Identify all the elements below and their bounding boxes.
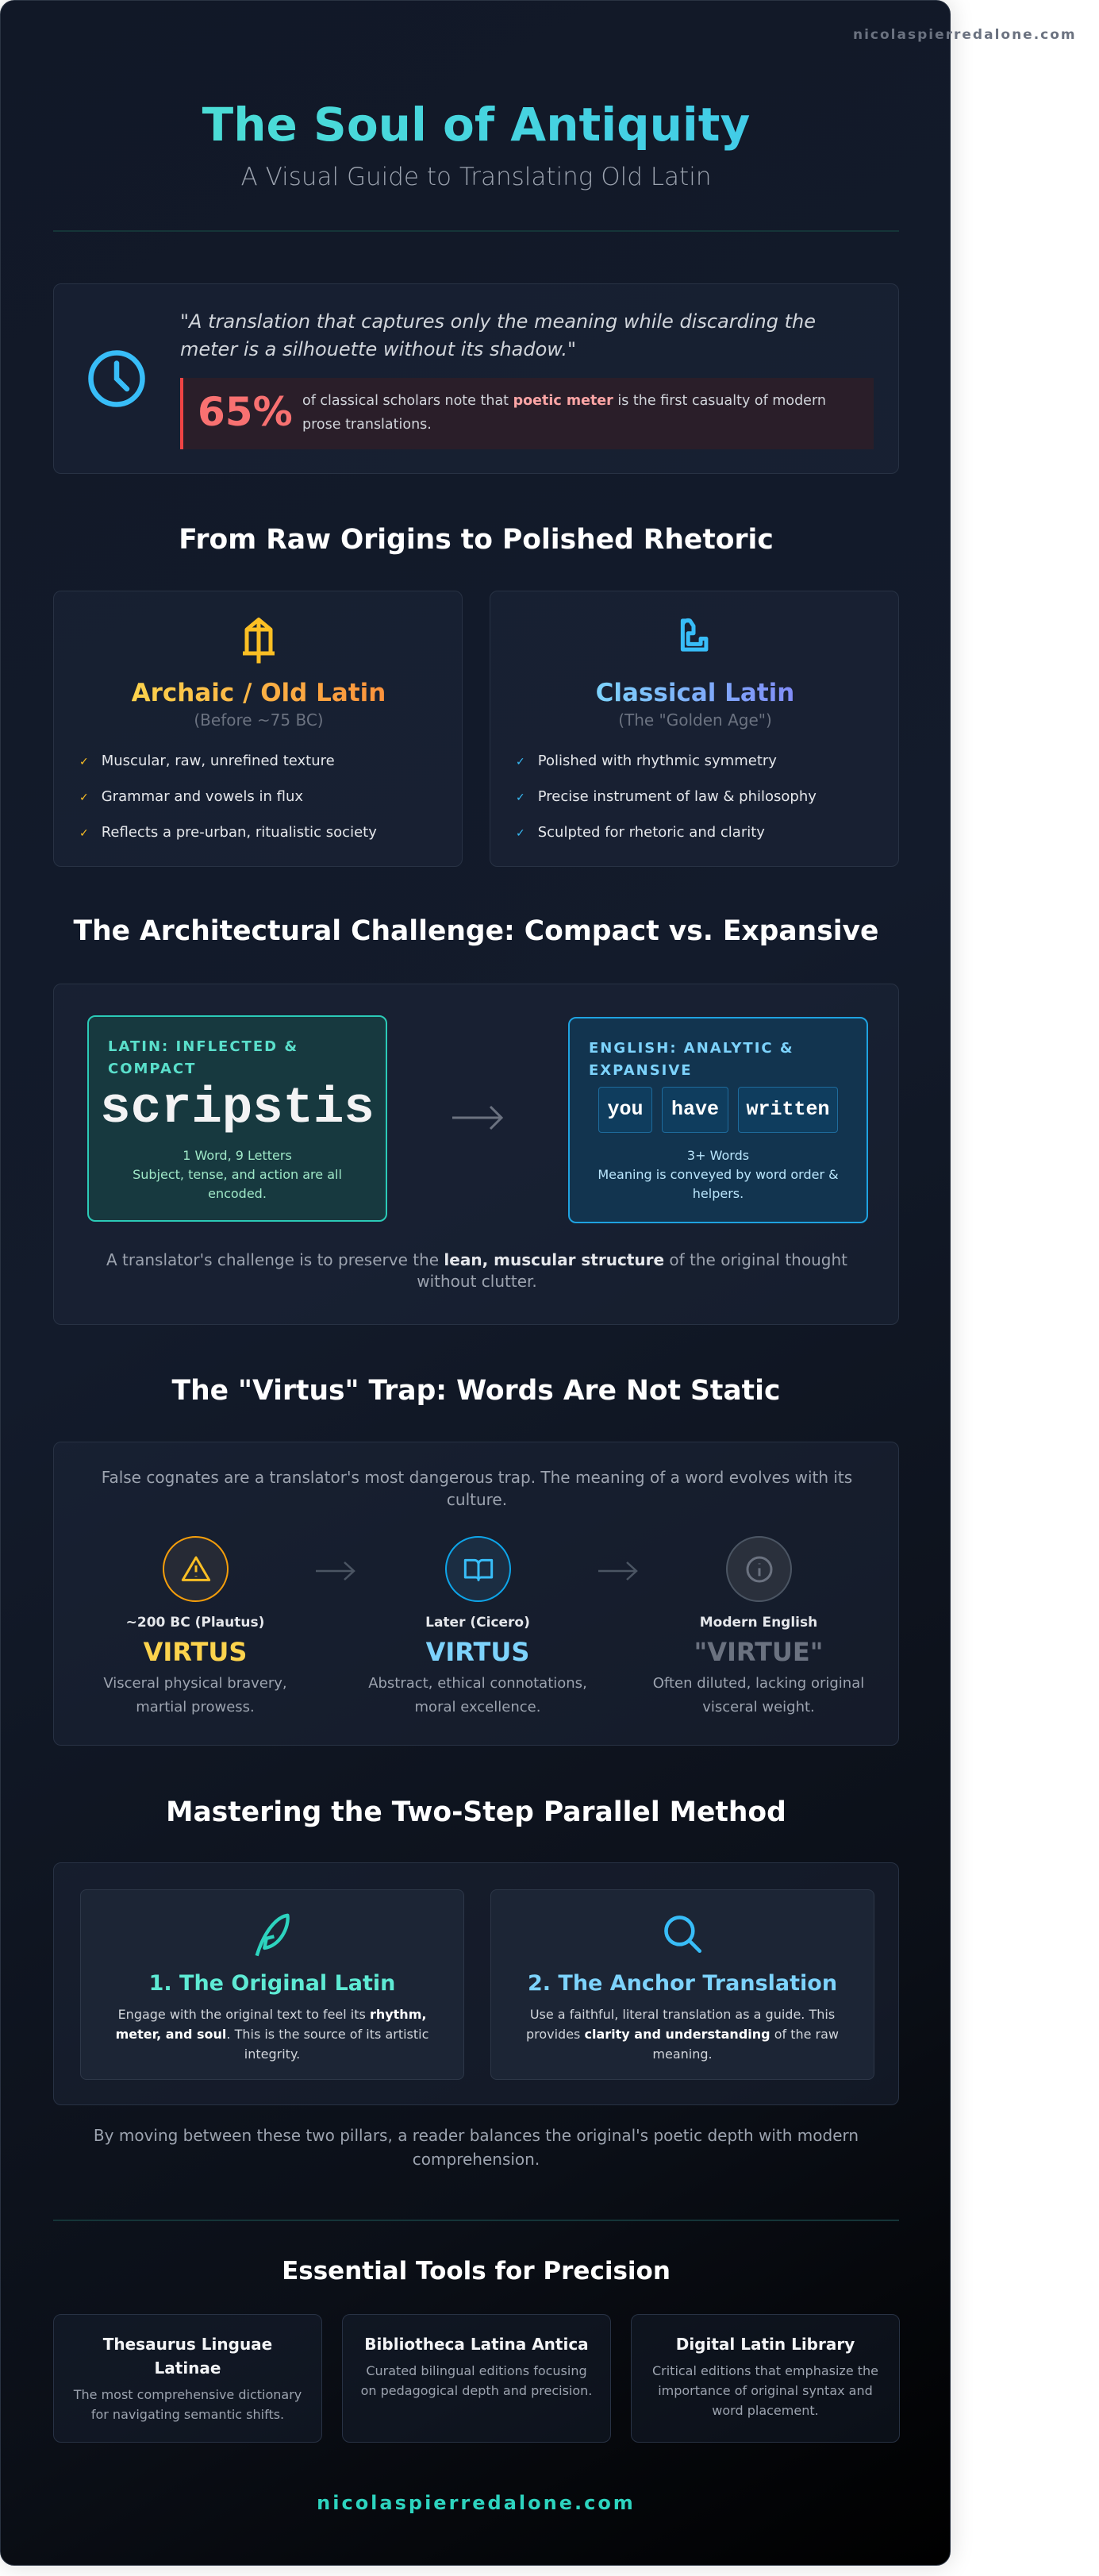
tool 2 bbox=[342, 2314, 611, 2443]
step 2: Use a faithful, literal translation as a guide. This provides clarity and understanding of the raw meaning. bbox=[526, 2007, 839, 2062]
stage 2: VIRTUS bbox=[426, 1637, 529, 1667]
arrow bbox=[452, 1106, 503, 1130]
watermark top: nicolaspierredalone.com bbox=[853, 27, 1077, 43]
heading: virtus: The "Virtus" Trap: Words Are Not Static bbox=[172, 1375, 780, 1407]
stage 1 bbox=[103, 1536, 287, 1715]
quote text: "A translation that captures only the meaning while discarding the meter is a silhouette without its shadow." bbox=[180, 310, 816, 360]
list archaic bbox=[79, 753, 377, 841]
intro: False cognates are a translator's most dangerous trap. The meaning of a word evolves with its culture. bbox=[102, 1468, 852, 1509]
step 2 bbox=[490, 1889, 874, 2080]
stage 3: "VIRTUE" bbox=[694, 1637, 823, 1667]
subtitle: A Visual Guide to Translating Old Latin bbox=[241, 163, 711, 191]
footer: nicolaspierredalone.com bbox=[317, 2492, 636, 2514]
step 2: 2. The Anchor Translation bbox=[528, 1971, 837, 1996]
box: english: have bbox=[671, 1098, 719, 1121]
list classical: ✓ Polished with rhythmic symmetry bbox=[516, 753, 777, 769]
list classical: ✓ Sculpted for rhetoric and clarity bbox=[516, 824, 765, 841]
box: english: Meaning is conveyed by word order & helpers. bbox=[598, 1167, 839, 1201]
box: latin: Subject, tense, and action are all encoded. bbox=[133, 1167, 342, 1201]
step 1 bbox=[80, 1889, 464, 2080]
list classical: ✓ Precise instrument of law & philosophy bbox=[516, 788, 817, 805]
subtitle classical: (The "Golden Age") bbox=[618, 710, 772, 730]
panel: classical bbox=[490, 591, 899, 867]
tool 3: Critical editions that emphasize the importance of original syntax and word placement. bbox=[652, 2363, 878, 2418]
tool 1: Thesaurus Linguae Latinae bbox=[103, 2335, 272, 2378]
stage 2: moral excellence. bbox=[415, 1699, 540, 1715]
step 1: 1. The Original Latin bbox=[149, 1971, 395, 1996]
box: english: written bbox=[746, 1098, 830, 1121]
heading: tools: Essential Tools for Precision bbox=[282, 2257, 671, 2285]
title classical: Classical Latin bbox=[596, 679, 794, 707]
icon: magnifier bbox=[664, 1916, 701, 1953]
box: latin: scripstis bbox=[100, 1080, 375, 1138]
stage 2 bbox=[368, 1536, 587, 1715]
stage 3: visceral weight. bbox=[702, 1699, 815, 1715]
title archaic: Archaic / Old Latin bbox=[132, 679, 386, 707]
panel: virtus bbox=[53, 1442, 899, 1746]
step 1: Engage with the original text to feel its rhythm, meter, and soul. This is the source of its artistic integrity. bbox=[116, 2007, 428, 2062]
panel: archaic bbox=[53, 591, 463, 867]
panel: two-step bbox=[53, 1862, 899, 2105]
stage 2: Later (Cicero) bbox=[425, 1615, 530, 1631]
list archaic: ✓ Muscular, raw, unrefined texture bbox=[79, 753, 335, 769]
caption: A translator's challenge is to preserve the lean, muscular structure of the original thought without clutter. bbox=[106, 1250, 847, 1291]
tool 2: Curated bilingual editions focusing on pedagogical depth and precision. bbox=[361, 2363, 592, 2398]
text: pillars: By moving between these two pillars, a reader balances the original's poetic depth with modern comprehension. bbox=[94, 2126, 859, 2169]
box: english: you bbox=[607, 1098, 643, 1121]
list classical bbox=[516, 753, 817, 841]
panel: quote bbox=[53, 283, 899, 474]
icon: quill bbox=[256, 1913, 290, 1956]
stage 1: VIRTUS bbox=[144, 1637, 247, 1667]
box: english bbox=[568, 1017, 868, 1223]
word chips bbox=[598, 1087, 838, 1133]
stage 2: Abstract, ethical connotations, bbox=[368, 1675, 587, 1692]
box: latin: 1 Word, 9 Letters bbox=[183, 1148, 292, 1163]
icon: classical bbox=[681, 618, 708, 652]
icon: archaic bbox=[243, 618, 275, 664]
panel: compact vs expansive bbox=[53, 984, 899, 1325]
heading: two-step: Mastering the Two-Step Parallel Method bbox=[166, 1796, 786, 1828]
tool 3 bbox=[631, 2314, 900, 2443]
title: The Soul of Antiquity bbox=[202, 98, 750, 152]
tool 1 bbox=[53, 2314, 322, 2443]
stat callout: of classical scholars note that poetic meter is the first casualty of modern prose translations. bbox=[302, 393, 826, 433]
tool 2: Bibliotheca Latina Antica bbox=[364, 2335, 589, 2354]
list archaic: ✓ Reflects a pre-urban, ritualistic society bbox=[79, 824, 377, 841]
arrow 1 bbox=[316, 1561, 355, 1581]
box: latin: LATIN: INFLECTED & COMPACT bbox=[108, 1038, 298, 1077]
heading: raw origins: From Raw Origins to Polished Rhetoric bbox=[179, 524, 774, 556]
heading: architectural: The Architectural Challenge: Compact vs. Expansive bbox=[74, 915, 878, 947]
box: english: 3+ Words bbox=[687, 1148, 749, 1163]
title bbox=[1, 98, 951, 152]
stage 1: martial prowess. bbox=[136, 1699, 255, 1715]
stat callout bbox=[180, 378, 874, 449]
box: english: ENGLISH: ANALYTIC & EXPANSIVE bbox=[589, 1040, 794, 1079]
stat callout: 65% bbox=[198, 389, 293, 435]
stage 1: Visceral physical bravery, bbox=[103, 1675, 287, 1692]
box: latin bbox=[87, 1015, 387, 1222]
subtitle archaic: (Before ~75 BC) bbox=[194, 710, 324, 730]
tool 1: The most comprehensive dictionary for navigating semantic shifts. bbox=[74, 2387, 302, 2422]
tool 3: Digital Latin Library bbox=[676, 2335, 855, 2354]
stage 3: Modern English bbox=[700, 1615, 817, 1631]
stage 3 bbox=[653, 1536, 864, 1715]
stage 1: ~200 BC (Plautus) bbox=[126, 1615, 264, 1631]
list archaic: ✓ Grammar and vowels in flux bbox=[79, 788, 303, 805]
stage 3: Often diluted, lacking original bbox=[653, 1675, 864, 1692]
icon: clock bbox=[88, 350, 145, 407]
arrow 2 bbox=[598, 1561, 638, 1581]
